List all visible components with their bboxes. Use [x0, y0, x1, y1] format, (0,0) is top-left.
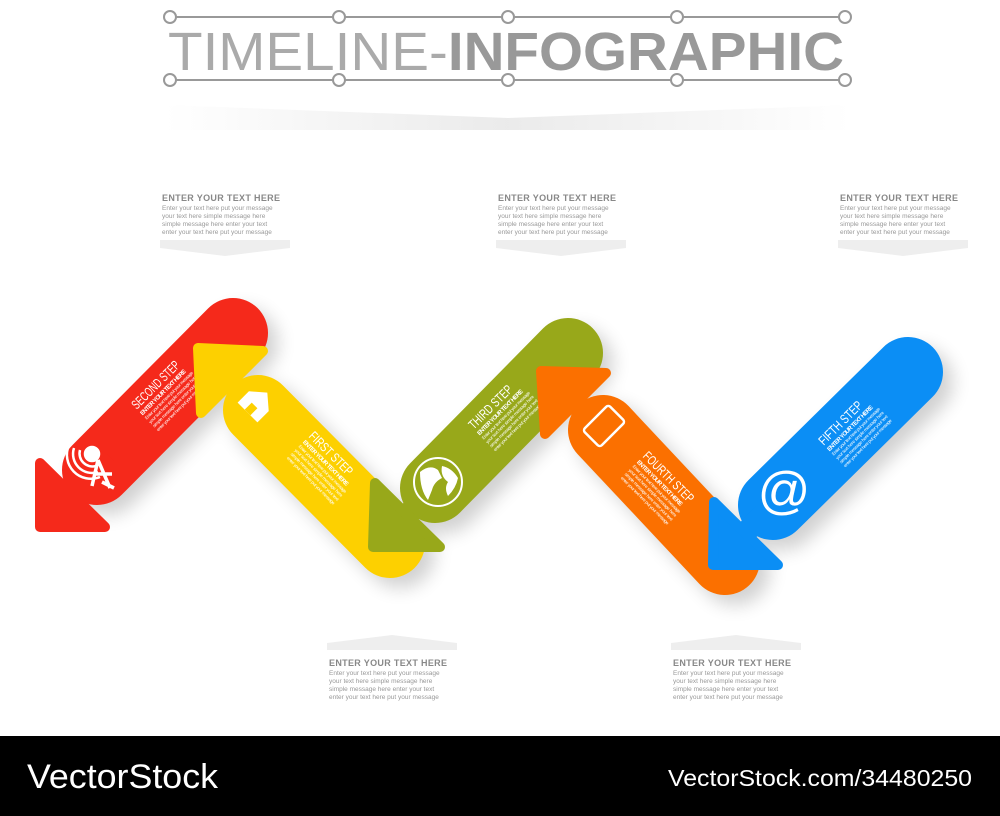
text block: bottom 1: simple message here enter your text	[329, 686, 434, 693]
footer	[0, 736, 1000, 816]
text block: top 3: your text here simple message here	[840, 213, 944, 220]
title	[164, 11, 851, 130]
text block: bottom 1: ENTER YOUR TEXT HERE	[329, 658, 447, 668]
step: third step (olive): enter your text here put your message	[493, 402, 543, 452]
step: first step (yellow): enter your text here put your message	[286, 456, 336, 506]
step: third step (olive): THIRD STEP	[465, 382, 516, 432]
text block: top 2: Enter your text here put your message	[498, 205, 609, 212]
step: second step (red): ENTER YOUR TEXT HERE	[140, 369, 188, 417]
step: fifth step (blue): simple message here enter your text	[839, 414, 889, 464]
text block: bottom 2: your text here simple message here	[673, 678, 777, 685]
step: second step (red): your text here simple message here	[148, 374, 198, 424]
shadows	[107, 343, 918, 570]
step: fourth step (orange): your text here simple message here	[628, 468, 678, 518]
footer: VectorStock	[27, 758, 219, 796]
step: third step (olive)	[373, 353, 568, 547]
text block: bottom 2: simple message here enter your text	[673, 686, 778, 693]
text block: top 2: enter your text here put your message	[498, 229, 608, 236]
step: first step (yellow): simple message here enter your text	[290, 452, 340, 502]
text block: bottom 1	[327, 635, 457, 701]
step: fifth step (blue): FIFTH STEP	[815, 398, 866, 448]
text block: top 1: simple message here enter your text	[162, 221, 267, 228]
text block: top 3: simple message here enter your text	[840, 221, 945, 228]
step: third step (olive): your text here simple message here	[485, 394, 535, 444]
step: fourth step (orange): FOURTH STEP	[640, 448, 697, 506]
step: second step (red): enter your text here put your message	[156, 382, 206, 432]
step: fourth step (orange): Enter your text here put your message	[631, 464, 682, 514]
step: third step (olive): ENTER YOUR TEXT HERE	[477, 389, 525, 437]
step: fifth step (blue): ENTER YOUR TEXT HERE	[827, 405, 875, 453]
text block: bottom 2: enter your text here put your message	[673, 694, 783, 701]
title: TIMELINE-INFOGRAPHIC	[168, 22, 844, 82]
step: fourth step (orange): ENTER YOUR TEXT HERE	[635, 460, 683, 508]
text block: bottom 2: Enter your text here put your message	[673, 670, 784, 677]
step: fourth step (orange)	[541, 371, 725, 560]
step: first step (yellow): your text here simple message here	[294, 448, 344, 498]
text block: top 1: Enter your text here put your message	[162, 205, 273, 212]
text block: top 3: Enter your text here put your message	[840, 205, 951, 212]
text block: top 2	[496, 193, 626, 256]
text block: bottom 2: ENTER YOUR TEXT HERE	[673, 658, 791, 668]
step: first step (yellow)	[198, 348, 390, 543]
step: second step (red): Enter your text here put your message	[144, 370, 194, 421]
text block: top 2: your text here simple message here	[498, 213, 602, 220]
icon: house	[238, 383, 277, 422]
text block: bottom 1: enter your text here put your message	[329, 694, 439, 701]
step: second step (red)	[40, 333, 233, 527]
step: fourth step (orange): enter your text here put your message	[620, 476, 670, 526]
text block: bottom 2	[671, 635, 801, 701]
step: fourth step (orange): simple message here enter your text	[624, 472, 674, 522]
icon: globe	[414, 458, 462, 506]
footer: VectorStock.com/34480250	[668, 765, 972, 791]
icon: antenna	[67, 445, 114, 488]
step: fifth step (blue)	[713, 372, 908, 565]
icon: at sign: @	[758, 462, 810, 520]
text block: top 1	[160, 193, 290, 256]
text block: top 3	[838, 193, 968, 256]
step: first step (yellow): FIRST STEP	[306, 428, 356, 479]
step: first step (yellow): Enter your text here put your message	[297, 444, 348, 494]
step: second step (red): SECOND STEP	[128, 358, 183, 412]
icon: phone	[583, 405, 625, 447]
text block: top 1: your text here simple message here	[162, 213, 266, 220]
text block: top 2: simple message here enter your text	[498, 221, 603, 228]
text block: top 3: enter your text here put your message	[840, 229, 950, 236]
text block: top 2: ENTER YOUR TEXT HERE	[498, 193, 616, 203]
step: second step (red): simple message here enter your text	[152, 378, 202, 428]
step: fifth step (blue): enter your text here put your message	[843, 418, 893, 468]
text block: bottom 1: Enter your text here put your message	[329, 670, 440, 677]
text block: top 3: ENTER YOUR TEXT HERE	[840, 193, 958, 203]
step: third step (olive): Enter your text here put your message	[481, 390, 531, 441]
text block: top 1: enter your text here put your message	[162, 229, 272, 236]
step: fifth step (blue): your text here simple message here	[835, 410, 885, 460]
step: first step (yellow): ENTER YOUR TEXT HERE	[301, 440, 349, 488]
step: third step (olive): simple message here enter your text	[489, 398, 539, 448]
text block: top 1: ENTER YOUR TEXT HERE	[162, 193, 280, 203]
step: fifth step (blue): Enter your text here put your message	[831, 406, 881, 457]
text block: bottom 1: your text here simple message here	[329, 678, 433, 685]
